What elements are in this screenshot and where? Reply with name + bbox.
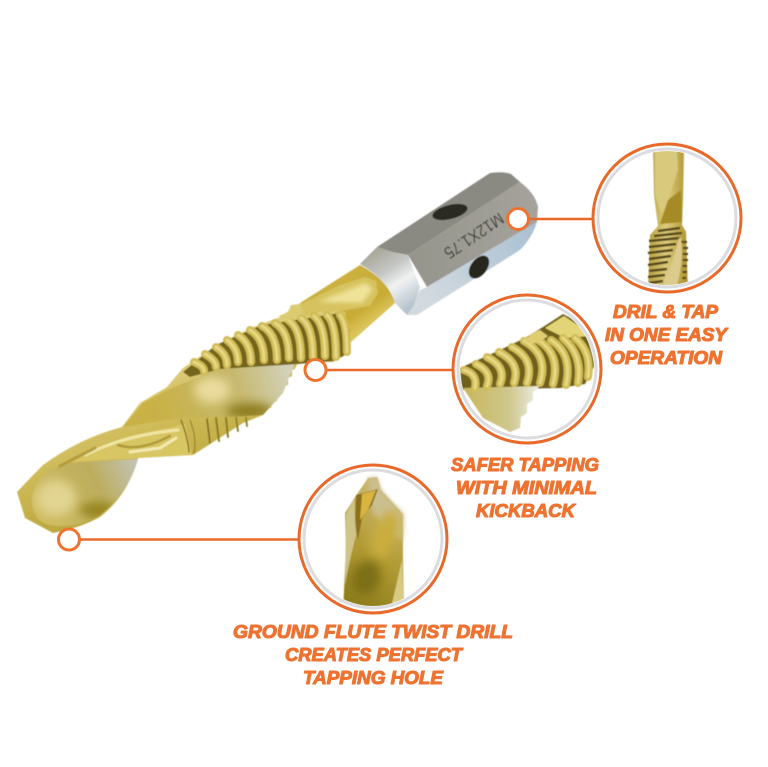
tip flute [32,459,138,526]
lower thread ribs [181,418,247,453]
caption: safer tapping: KICKBACK [476,500,577,521]
caption: drill and tap: IN ONE EASY [605,324,729,345]
glossy land near tip [60,424,192,466]
mid flute [123,362,295,427]
caption: drill and tap [605,301,729,368]
gold shoulder [300,265,395,343]
lower cross hole [465,252,493,282]
callout: ground flute [58,465,513,688]
shoulder flute highlight [297,277,378,316]
thread groove backdrop [183,313,350,377]
marker dot [305,360,326,380]
caption: ground flute [233,621,513,688]
caption: ground flute: TAPPING HOLE [303,667,444,688]
silver collar [360,247,420,315]
marker dot [508,208,528,230]
connector line [528,218,594,220]
callout: safer tapping [305,295,601,521]
shank: engraved hex face [408,182,538,287]
shank: lower polished face [407,222,537,315]
drill and tap bit [17,172,538,533]
caption: safer tapping: WITH MINIMAL [456,477,597,498]
caption: ground flute: CREATES PERFECT [285,644,464,665]
caption: drill and tap: OPERATION [610,347,723,368]
inset ring [299,465,447,613]
connector line [326,369,454,371]
inset: drill and tap photo [648,150,688,290]
gold body [17,303,350,533]
inset: thread photo [460,314,595,432]
main thread ribs [194,315,347,371]
inset ring [593,144,741,292]
shoulder flute sheen [318,283,373,303]
caption: safer tapping: SAFER TAPPING [451,454,599,475]
callout: drill and tap [508,144,741,368]
connector line [79,538,299,541]
caption: ground flute: GROUND FLUTE TWIST DRILL [233,621,513,642]
caption: drill and tap: DRIL & TAP [613,301,719,322]
caption: safer tapping [451,454,599,521]
top cross hole [431,201,469,223]
shoulder notch [279,304,303,322]
marker dot [58,529,80,550]
size marking: M12X1.75 [440,209,507,262]
shank: top hex face [377,172,520,255]
inset: drill tip photo [343,477,405,612]
inset ring [453,295,601,443]
